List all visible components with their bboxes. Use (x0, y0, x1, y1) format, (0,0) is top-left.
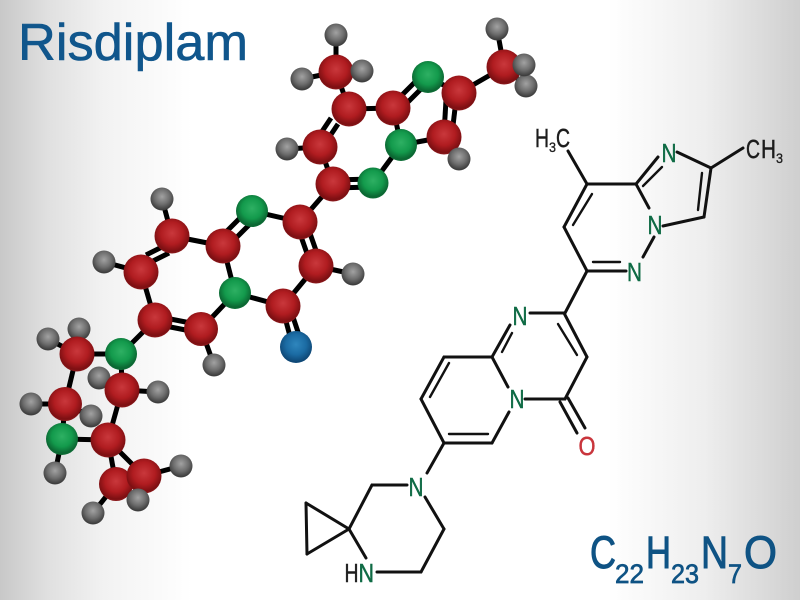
atom label: CH3: H (761, 134, 776, 164)
nitrogen labels: N (512, 301, 528, 331)
inner double bond lines (430, 167, 702, 434)
atom label: HN (344, 558, 374, 588)
atom label: CH3 (746, 134, 783, 166)
chemical formula: N (701, 527, 728, 578)
chemical formula: 7 (728, 559, 742, 589)
skeletal structural formula (306, 123, 783, 588)
atom label: H3C: C (556, 123, 570, 153)
chemical formula: 22 (615, 559, 644, 589)
title: Risdiplam (18, 14, 248, 72)
atom label: HN: N (358, 558, 374, 588)
chemical formula (590, 527, 777, 589)
nitrogen labels (408, 138, 676, 502)
nitrogen labels: N (510, 384, 524, 414)
hydrogen atoms in front (20, 18, 536, 524)
oxygen label: O (578, 431, 596, 461)
chemical formula: 23 (671, 559, 699, 589)
skeletal bonds (306, 148, 743, 572)
atom label: CH3: 3 (776, 150, 783, 166)
nitrogen labels: N (648, 210, 662, 240)
atom label: H3C: 3 (549, 139, 556, 155)
chemical formula: C (590, 527, 616, 578)
nitrogen atoms (46, 61, 444, 455)
atom label: HN: H (344, 558, 358, 588)
oxygen atom (280, 331, 312, 363)
atom label: CH3: C (746, 134, 760, 164)
carbon atoms (48, 50, 522, 501)
nitrogen labels: N (662, 138, 676, 168)
chemical formula: H (646, 527, 671, 578)
nitrogen labels: N (408, 472, 424, 502)
chemical formula: O (744, 527, 777, 578)
atom label: H3C: H (535, 123, 549, 153)
hydrogen atoms behind carbons (68, 74, 538, 428)
bonds of 3D model (31, 29, 526, 513)
ball-and-stick 3D molecular model (20, 18, 538, 524)
atom label: H3C (535, 123, 570, 155)
nitrogen labels: N (627, 257, 642, 287)
